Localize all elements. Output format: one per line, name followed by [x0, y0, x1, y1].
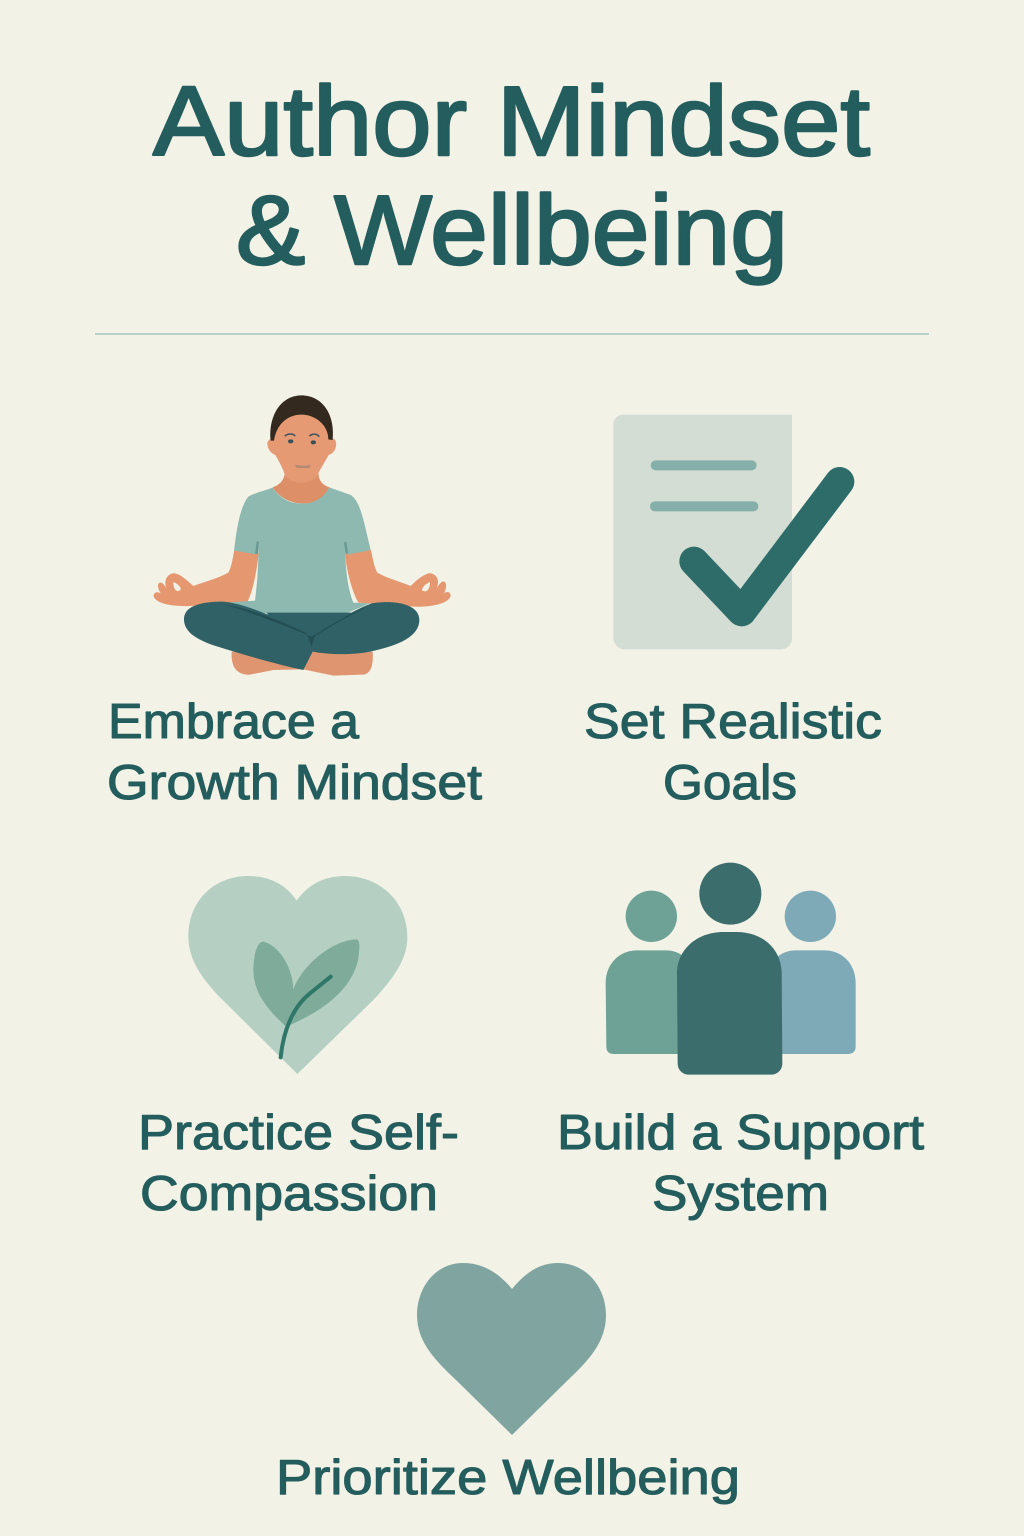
feet	[232, 652, 373, 676]
panel: self-compassion	[138, 876, 459, 1221]
title	[153, 66, 870, 285]
label: embrace a growth mindset: Growth Mindset	[107, 756, 482, 810]
left person	[626, 891, 677, 942]
label: build a support system: System	[652, 1167, 829, 1221]
leaves	[253, 939, 359, 1027]
crossed legs	[267, 613, 353, 652]
label: set realistic goals: Goals	[663, 756, 797, 810]
eyes, brows and mouth	[285, 434, 319, 468]
panel: growth mindset	[107, 395, 482, 810]
heart	[188, 876, 407, 1074]
label: build a support system	[557, 1106, 924, 1221]
icon: heart with leaves	[188, 876, 407, 1074]
label: embrace a growth mindset: Embrace a	[108, 695, 360, 749]
panel: realistic goals	[584, 415, 882, 810]
hair	[270, 395, 333, 441]
label: prioritize wellbeing: Prioritize Wellbeing	[276, 1451, 740, 1505]
label: build a support system: Build a Support	[557, 1106, 924, 1160]
document	[613, 415, 792, 649]
label: practice self-compassion	[138, 1106, 459, 1221]
stem	[281, 977, 331, 1057]
t-shirt	[227, 487, 371, 613]
icon: document with checkmark	[613, 415, 840, 649]
face	[267, 415, 336, 483]
label: embrace a growth mindset	[107, 695, 482, 810]
label: set realistic goals	[584, 695, 882, 810]
panel: prioritize wellbeing	[276, 1263, 740, 1505]
finger gaps	[173, 582, 430, 591]
icon: meditating person	[154, 395, 451, 676]
icon: three people	[606, 863, 856, 1075]
label: practice self-compassion: Compassion	[140, 1167, 438, 1221]
label: practice self-compassion: Practice Self-	[138, 1106, 459, 1160]
icon: heart	[417, 1263, 606, 1435]
centre person	[699, 863, 761, 925]
arms and hands	[154, 550, 259, 606]
label: set realistic goals: Set Realistic	[584, 695, 882, 749]
panel: support system	[557, 863, 924, 1221]
title: Author Mindset	[153, 66, 870, 176]
checkmark	[694, 482, 840, 612]
right person	[785, 891, 836, 942]
neck	[273, 470, 329, 503]
title: & Wellbeing	[236, 175, 788, 285]
text lines	[651, 460, 757, 470]
